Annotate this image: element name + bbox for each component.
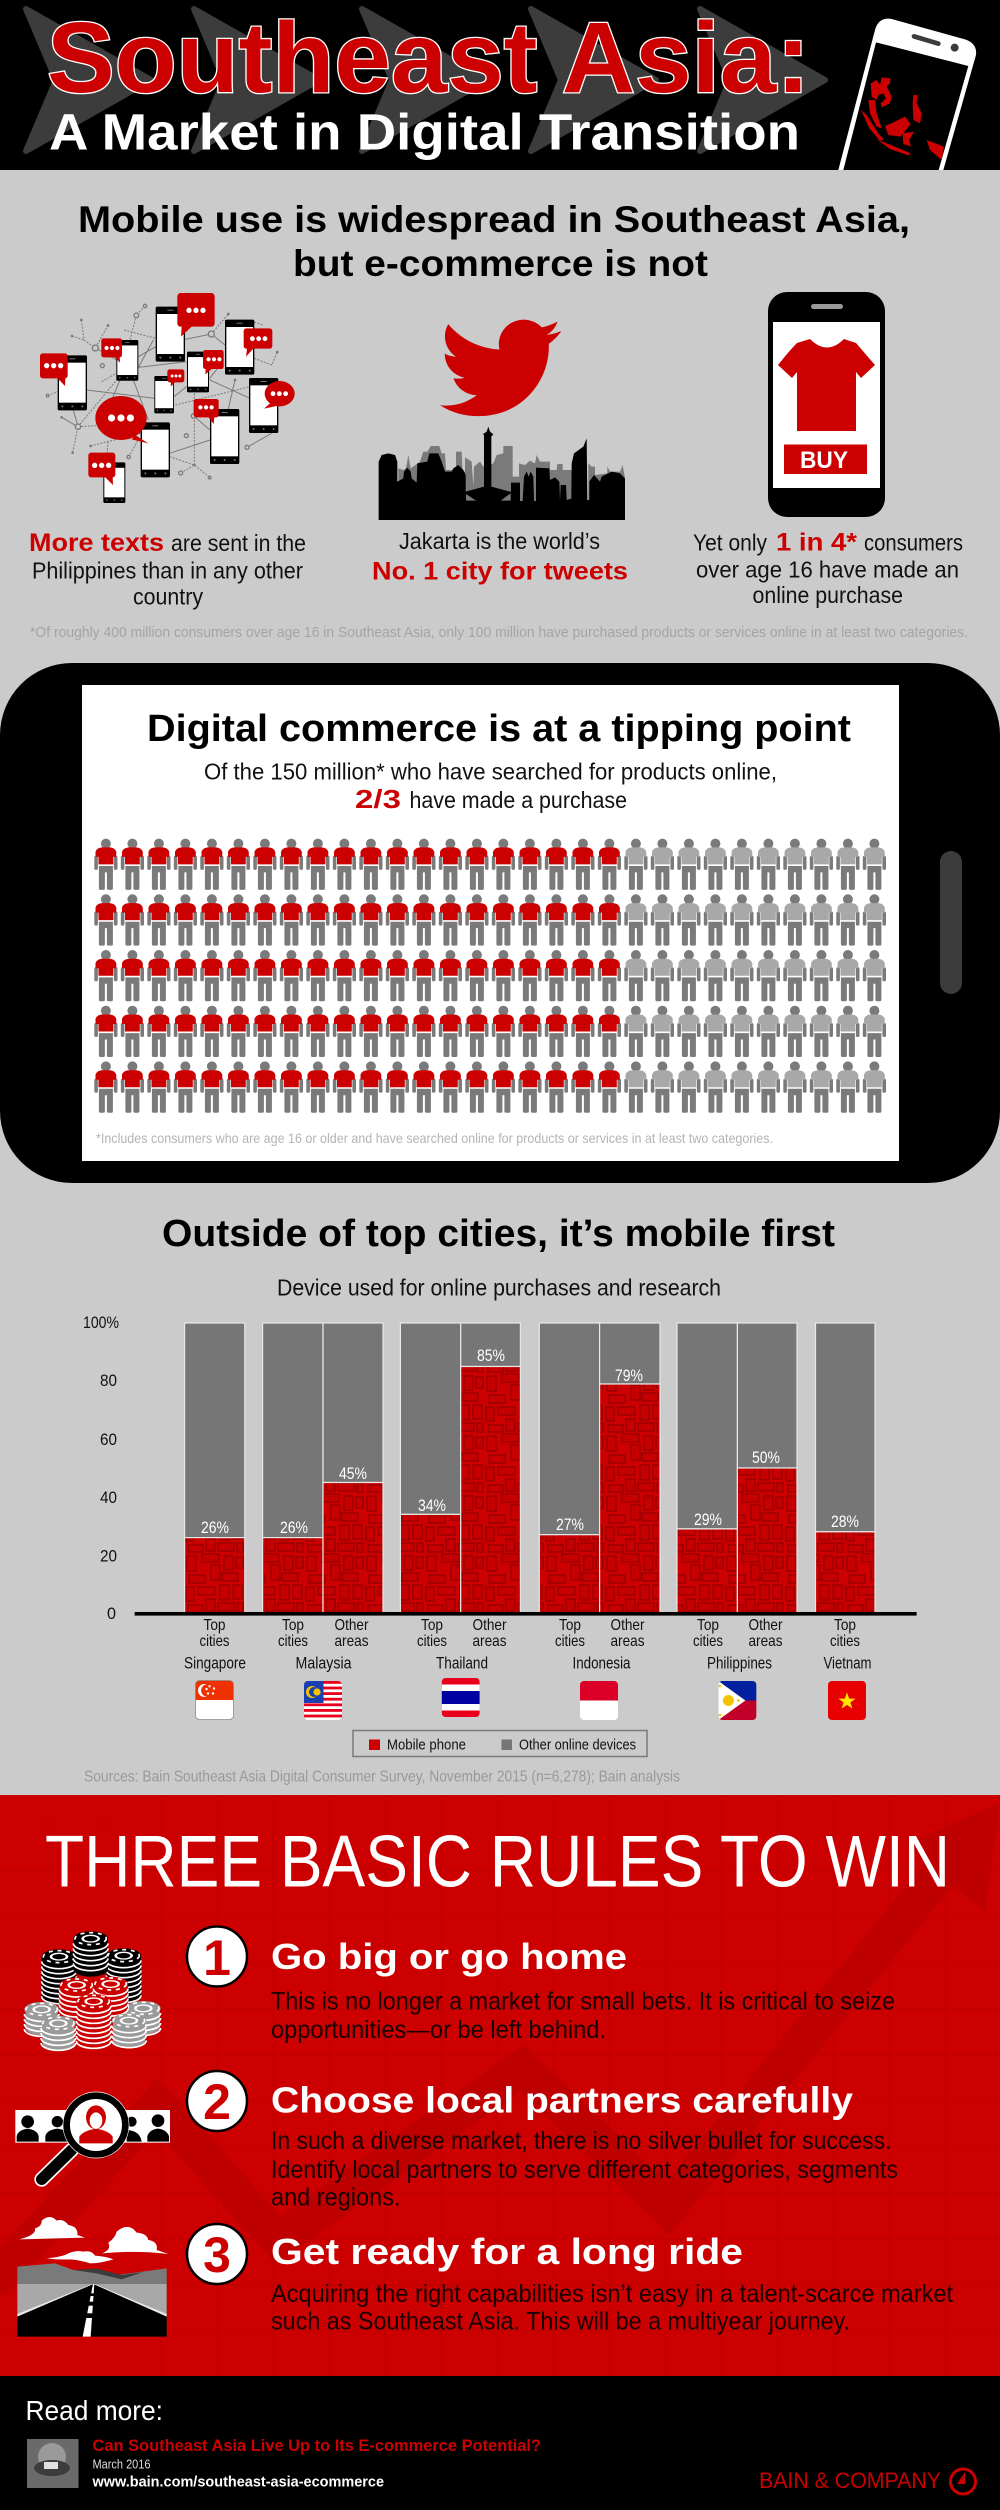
flag: Indonesia	[580, 1681, 618, 1720]
rule 2 text: Identify local partners to serve different categories, segments	[271, 2156, 898, 2184]
Bain and Company logo: BAIN & COMPANY	[759, 2468, 941, 2493]
report url: www.bain.com/southeast-asia-ecommerce	[92, 2474, 384, 2490]
rule 1 text: This is no longer a market for small bets. It is critical to seize	[271, 1988, 895, 2016]
report date: March 2016	[92, 2456, 150, 2472]
caption: more texts: Philippines than in any other	[32, 558, 303, 584]
caption: 1 in 4: Yet only	[693, 530, 767, 556]
x axis category labels: areas	[472, 1633, 506, 1650]
caption: Jakarta tweets: No. 1 city for tweets	[372, 558, 628, 586]
title line 2: A Market in Digital Transition	[49, 104, 800, 160]
number 3	[187, 2224, 247, 2284]
rule 1 text	[271, 1936, 895, 2044]
rule 3 text: Get ready for a long ride	[271, 2231, 743, 2272]
rule 3 text: such as Southeast Asia. This will be a multiyear journey.	[271, 2308, 850, 2336]
stacked bars	[185, 1323, 875, 1613]
legend: Mobile phone	[387, 1736, 466, 1754]
heading: mobile first: Outside of top cities, it’s mobile first	[162, 1213, 835, 1255]
rule 2 text: Choose local partners carefully	[271, 2080, 853, 2120]
x axis category labels: Top	[421, 1617, 443, 1634]
number 3: 3	[203, 2227, 231, 2283]
panel: mobile use	[0, 170, 1000, 1795]
value labels: 27%	[556, 1515, 584, 1534]
y axis labels: 100%	[83, 1313, 119, 1332]
caption: Jakarta tweets	[372, 528, 628, 586]
title line 1: Southeast Asia:	[47, 2, 810, 114]
phone side button	[940, 851, 962, 994]
subheading: 2/3	[355, 784, 401, 814]
rule 1 text: opportunities—or be left behind.	[271, 2016, 606, 2044]
caption: 1 in 4: 1 in 4*	[776, 528, 857, 556]
x axis category labels: Top	[282, 1617, 304, 1634]
value labels: 26%	[201, 1518, 229, 1537]
flag: Malaysia	[304, 1681, 342, 1720]
flag: Singapore	[196, 1680, 234, 1720]
icon: phone with shirt and buy button	[768, 292, 885, 517]
rule 2 text: In such a diverse market, there is no silver bullet for success.	[271, 2127, 892, 2155]
people pictogram: 100 of 150 red	[94, 839, 886, 1113]
caption: 1 in 4: over age 16 have made an	[696, 556, 959, 582]
icon: twitter bird	[440, 320, 561, 416]
x axis category labels: Top	[834, 1617, 856, 1634]
x axis category labels: cities	[278, 1633, 308, 1650]
caption: 1 in 4: online purchase	[752, 582, 903, 608]
y axis labels: 40	[100, 1488, 117, 1507]
x axis category labels: Top	[204, 1617, 226, 1634]
x axis category labels: Top	[697, 1617, 719, 1634]
x axis category labels: areas	[748, 1633, 782, 1650]
y axis labels	[83, 1313, 119, 1623]
icon: network of phones with message bubbles	[40, 293, 295, 503]
x axis category labels: Top	[559, 1617, 581, 1634]
panel: footer	[0, 2376, 1000, 2510]
chevron arrows	[26, 9, 825, 151]
x axis category labels: Other	[748, 1617, 783, 1634]
y axis labels: 80	[100, 1371, 117, 1390]
x axis category labels: Other	[472, 1617, 507, 1634]
heading: tipping point: Digital commerce is at a tipping point	[147, 708, 851, 750]
icon: magnifier over people	[15, 2092, 170, 2179]
caption: more texts: More texts	[29, 529, 164, 557]
icon: Jakarta skyline	[379, 427, 625, 520]
subheading	[204, 758, 777, 814]
phone screen	[82, 685, 899, 1161]
heading: mobile use: Mobile use is widespread in Southeast Asia,	[78, 199, 910, 240]
rule 3 text: Acquiring the right capabilities isn’t easy in a talent-scarce market	[271, 2280, 953, 2308]
heading: mobile use	[78, 199, 910, 284]
x axis category labels: areas	[334, 1633, 368, 1650]
sources: Sources: Bain Southeast Asia Digital Consumer Survey, November 2015 (n=6,278); Bain analysis	[84, 1768, 680, 1786]
caption: more texts: country	[133, 584, 203, 610]
rule 3 text	[271, 2231, 953, 2336]
x axis category labels	[200, 1617, 860, 1650]
value labels: 85%	[477, 1346, 505, 1365]
report thumbnail	[27, 2439, 78, 2488]
y axis labels: 0	[107, 1604, 116, 1623]
icon: road and clouds	[17, 2217, 168, 2337]
x axis category labels: cities	[417, 1633, 447, 1650]
chart subtitle: Device used for online purchases and research	[277, 1274, 721, 1300]
country labels: Thailand	[436, 1654, 488, 1672]
background rising arrow	[0, 1803, 1000, 2285]
country labels: Vietnam	[824, 1654, 872, 1672]
panel: tipping point phone	[0, 663, 1000, 1183]
rule 1 text: Go big or go home	[271, 1936, 627, 1977]
country labels: Singapore	[184, 1654, 246, 1672]
value labels	[201, 1346, 859, 1537]
number 2: 2	[203, 2074, 231, 2130]
header band	[0, 0, 1000, 170]
icon: tilted phone with map	[838, 19, 976, 170]
x axis category labels: areas	[610, 1633, 644, 1650]
report title: Can Southeast Asia Live Up to Its E-commerce Potential?	[92, 2436, 541, 2455]
x axis category labels: cities	[200, 1633, 230, 1650]
y axis labels: 20	[100, 1546, 117, 1566]
value labels: 50%	[752, 1448, 780, 1467]
x axis category labels: cities	[693, 1633, 723, 1650]
x axis category labels: Other	[610, 1617, 645, 1634]
heading: mobile use: but e-commerce is not	[293, 243, 708, 284]
caption: 1 in 4: consumers	[864, 530, 963, 556]
flag: Thailand	[442, 1678, 480, 1717]
value labels: 79%	[615, 1366, 643, 1385]
legend	[353, 1730, 647, 1756]
number 1	[187, 1926, 247, 1986]
country labels	[184, 1654, 872, 1672]
value labels: 26%	[280, 1518, 308, 1537]
x axis category labels: cities	[830, 1633, 860, 1650]
x axis category labels: cities	[555, 1633, 585, 1650]
rule 2 text	[271, 2080, 898, 2212]
x axis category labels: Other	[334, 1617, 369, 1634]
caption: Jakarta tweets: Jakarta is the world’s	[399, 528, 600, 554]
country labels: Malaysia	[296, 1654, 352, 1672]
icon: phone with shirt and buy button: BUY	[800, 447, 848, 474]
x axis line	[135, 1612, 917, 1616]
value labels: 34%	[418, 1496, 446, 1515]
flag: Vietnam	[828, 1681, 866, 1720]
footnote: tipping point: *Includes consumers who are age 16 or older and have searched online for products or services in at least two categories.	[96, 1130, 773, 1146]
icon: casino chips	[24, 1931, 161, 2051]
number 2	[187, 2071, 247, 2131]
read more label: Read more:	[26, 2395, 163, 2426]
caption: 1 in 4	[693, 528, 963, 608]
rule 2 text: and regions.	[271, 2184, 400, 2212]
subheading: Of the 150 million* who have searched for products online,	[204, 758, 777, 784]
number 1: 1	[203, 1930, 231, 1986]
value labels: 45%	[339, 1464, 367, 1483]
country labels: Philippines	[707, 1654, 772, 1672]
panel: mobile first chart	[83, 1213, 917, 1786]
value labels: 28%	[831, 1512, 859, 1531]
y axis labels: 60	[100, 1430, 117, 1449]
legend: Other online devices	[519, 1736, 636, 1754]
flag: Philippines	[718, 1681, 756, 1720]
caption: more texts	[29, 529, 306, 610]
country labels: Indonesia	[572, 1654, 631, 1672]
panel: three basic rules	[0, 1795, 1000, 2376]
subheading: have made a purchase	[410, 787, 627, 813]
caption: more texts: are sent in the	[171, 530, 306, 556]
value labels: 29%	[694, 1510, 722, 1529]
